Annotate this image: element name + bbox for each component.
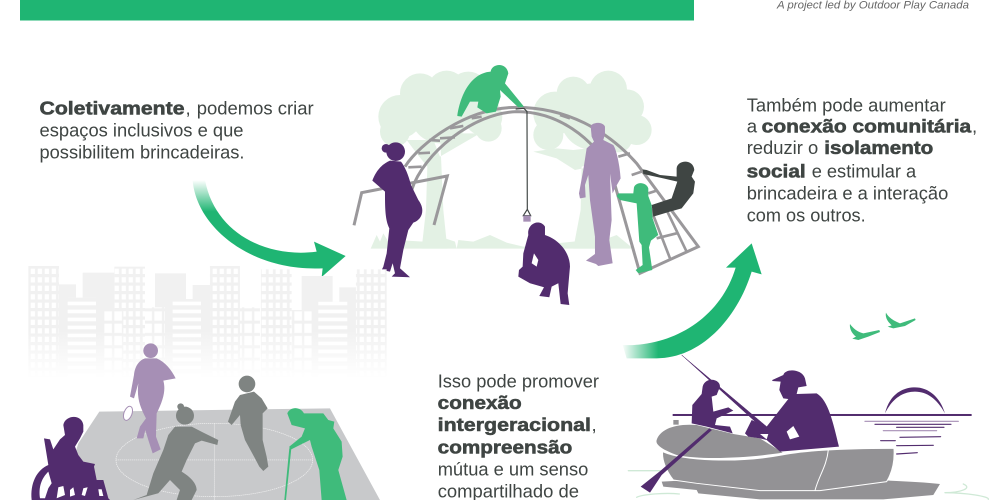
text block: community connection: a bbox=[747, 116, 758, 137]
arch frame bbox=[354, 107, 698, 273]
rope and bucket bbox=[516, 108, 531, 222]
gray child centre bbox=[133, 403, 218, 500]
birds bbox=[850, 313, 916, 340]
text block: community connection: e estimular a bbox=[812, 160, 917, 181]
man with hat and rod bbox=[682, 355, 839, 452]
sun and horizon bbox=[673, 387, 972, 416]
dark figure climbing bbox=[643, 162, 695, 217]
text block: intergenerational connection: mútua e um senso bbox=[438, 459, 588, 480]
water reflections bbox=[628, 421, 988, 499]
text block: intergenerational connection: , bbox=[592, 414, 597, 435]
text block: intergenerational connection bbox=[438, 371, 599, 500]
header bar bbox=[20, 0, 694, 20]
illustration: city square bbox=[27, 266, 390, 500]
text block: community connection: , bbox=[972, 116, 977, 137]
green child on top bbox=[457, 65, 524, 117]
trees background bbox=[371, 71, 652, 249]
city skyline bbox=[27, 266, 390, 379]
text block: community connection: conexão comunitária bbox=[762, 116, 972, 137]
text block: intergenerational connection: intergeracional bbox=[438, 414, 591, 435]
arrow: collective to playground bbox=[193, 180, 346, 277]
purple woman bbox=[372, 142, 422, 277]
text block: collectively: espaços inclusivos e que bbox=[40, 120, 244, 141]
text block: intergenerational connection: conexão bbox=[438, 392, 522, 413]
court bbox=[60, 408, 380, 500]
text block: community connection bbox=[747, 95, 977, 226]
lavender adult bbox=[579, 123, 621, 266]
wheelchair user bbox=[31, 417, 110, 500]
text block: collectively: , bbox=[186, 98, 191, 118]
gray child right bbox=[228, 376, 268, 471]
text block: collectively bbox=[40, 98, 314, 162]
text block: collectively: possibilitem brincadeiras. bbox=[40, 141, 244, 162]
text block: intergenerational connection: Isso pode promover bbox=[438, 371, 599, 392]
illustration: fishing on a lake bbox=[628, 313, 988, 499]
gray boat bbox=[656, 420, 940, 499]
text block: intergenerational connection: compreensão bbox=[438, 436, 572, 457]
illustration: playground climbing arch bbox=[354, 65, 698, 305]
green child on frame bbox=[617, 183, 658, 273]
lavender woman with racket bbox=[122, 343, 176, 453]
text block: collectively: Coletivamente bbox=[40, 98, 184, 118]
text block: community connection: reduzir o bbox=[747, 137, 818, 158]
text block: community connection: social bbox=[747, 160, 806, 181]
boy bbox=[692, 380, 733, 433]
text block: community connection: com os outros. bbox=[747, 205, 866, 226]
arrow: playground to community bbox=[623, 243, 762, 358]
text block: community connection: brincadeira e a interação bbox=[747, 182, 948, 203]
green elder with cane bbox=[284, 408, 347, 500]
crouching purple adult bbox=[518, 223, 570, 305]
text block: collectively: podemos criar bbox=[197, 98, 314, 118]
text block: community connection: Também pode aumentar bbox=[747, 95, 946, 116]
oar bbox=[641, 428, 712, 493]
text block: community connection: isolamento bbox=[824, 137, 933, 158]
